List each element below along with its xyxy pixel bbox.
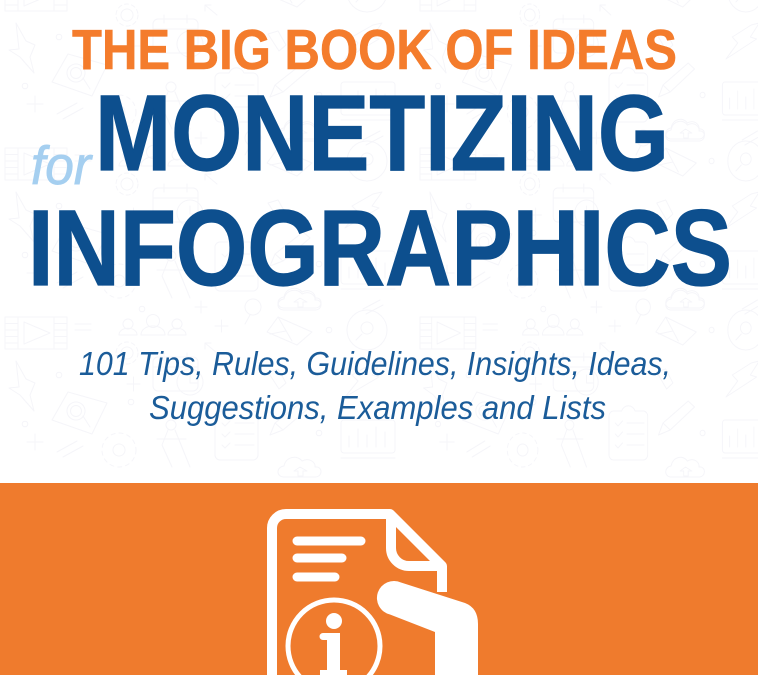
title: the big book of ideas: THE BIG BOOK OF IDEAS xyxy=(72,18,677,82)
icon: information document held by hand xyxy=(272,514,478,675)
panel: orange band xyxy=(0,483,758,675)
title: monetizing: MONETIZING xyxy=(95,72,669,193)
icon: text lines xyxy=(297,541,361,577)
subtitle: 101 Tips, Rules, Guidelines, Insights, Ideas, xyxy=(79,345,671,382)
subtitle: Suggestions, Examples and Lists xyxy=(149,389,606,426)
icon: thumb xyxy=(377,581,478,675)
title word: for: for xyxy=(31,136,93,196)
icon: document outline xyxy=(272,514,442,675)
icon: folded corner xyxy=(391,514,442,566)
subtitle xyxy=(79,345,671,426)
icon: info circle xyxy=(288,600,380,675)
background icon pattern xyxy=(5,0,758,477)
